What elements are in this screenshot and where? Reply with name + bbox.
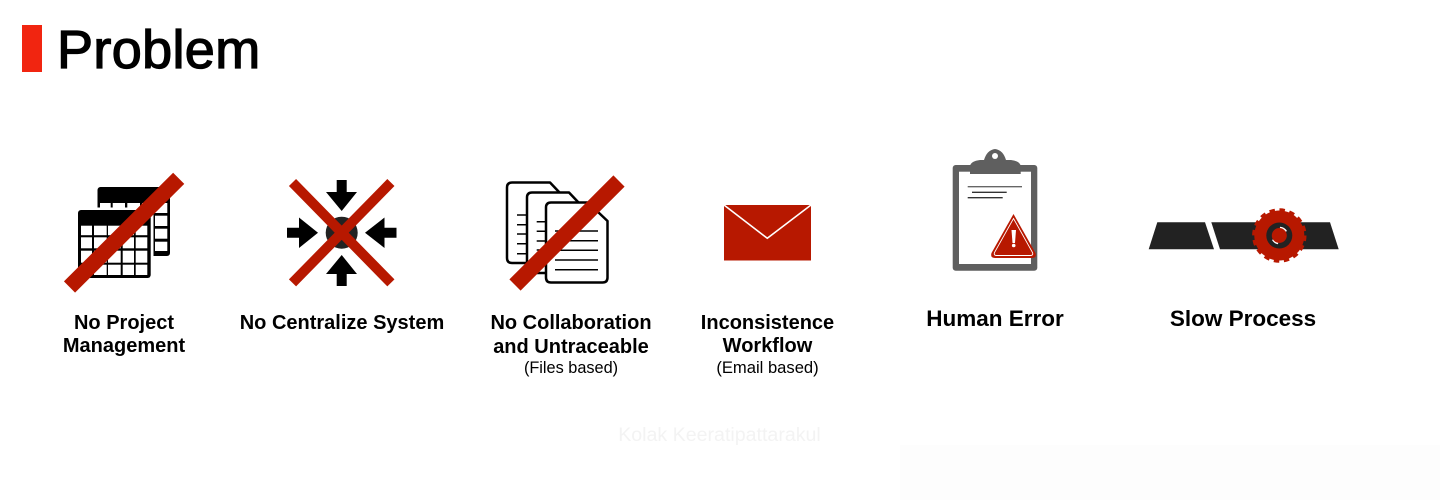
label: No Collaboration and Untraceable (Files based): (Files based) [524, 359, 618, 377]
panel: inconsistence workflow [701, 205, 834, 377]
panel: no collaboration [490, 181, 652, 377]
label: No Project Management: No Project [74, 312, 174, 334]
label: Human Error: Human Error [926, 306, 1064, 331]
icon: road with gear [1149, 210, 1339, 261]
panel: no centralize system [240, 180, 444, 334]
panel: slow process [1149, 210, 1339, 331]
label: Slow Process: Slow Process [1170, 306, 1316, 331]
watermark: Kolak Keeratipattarakul [618, 424, 821, 446]
icon: crossed-out files [507, 181, 619, 285]
label: Inconsistence Workflow (Email based): (Email based) [716, 358, 819, 377]
panel: human error [926, 149, 1064, 331]
label: Inconsistence Workflow (Email based): Workflow [723, 335, 813, 357]
title: Problem: Problem [57, 20, 261, 80]
panel: no project management [63, 178, 185, 357]
label: No Project Management: Management [63, 335, 185, 357]
icon: envelope [724, 205, 811, 260]
icon: crossed-out calendars [70, 178, 179, 287]
label: Inconsistence Workflow (Email based): Inconsistence [701, 312, 834, 334]
icon: clipboard with warning [953, 149, 1037, 271]
icon: crossed-out converging arrows [287, 180, 396, 286]
label: No Collaboration and Untraceable (Files based): and Untraceable [493, 336, 649, 358]
label: No Centralize System: No Centralize System [240, 312, 444, 334]
label: No Collaboration and Untraceable (Files based): No Collaboration [490, 312, 652, 334]
